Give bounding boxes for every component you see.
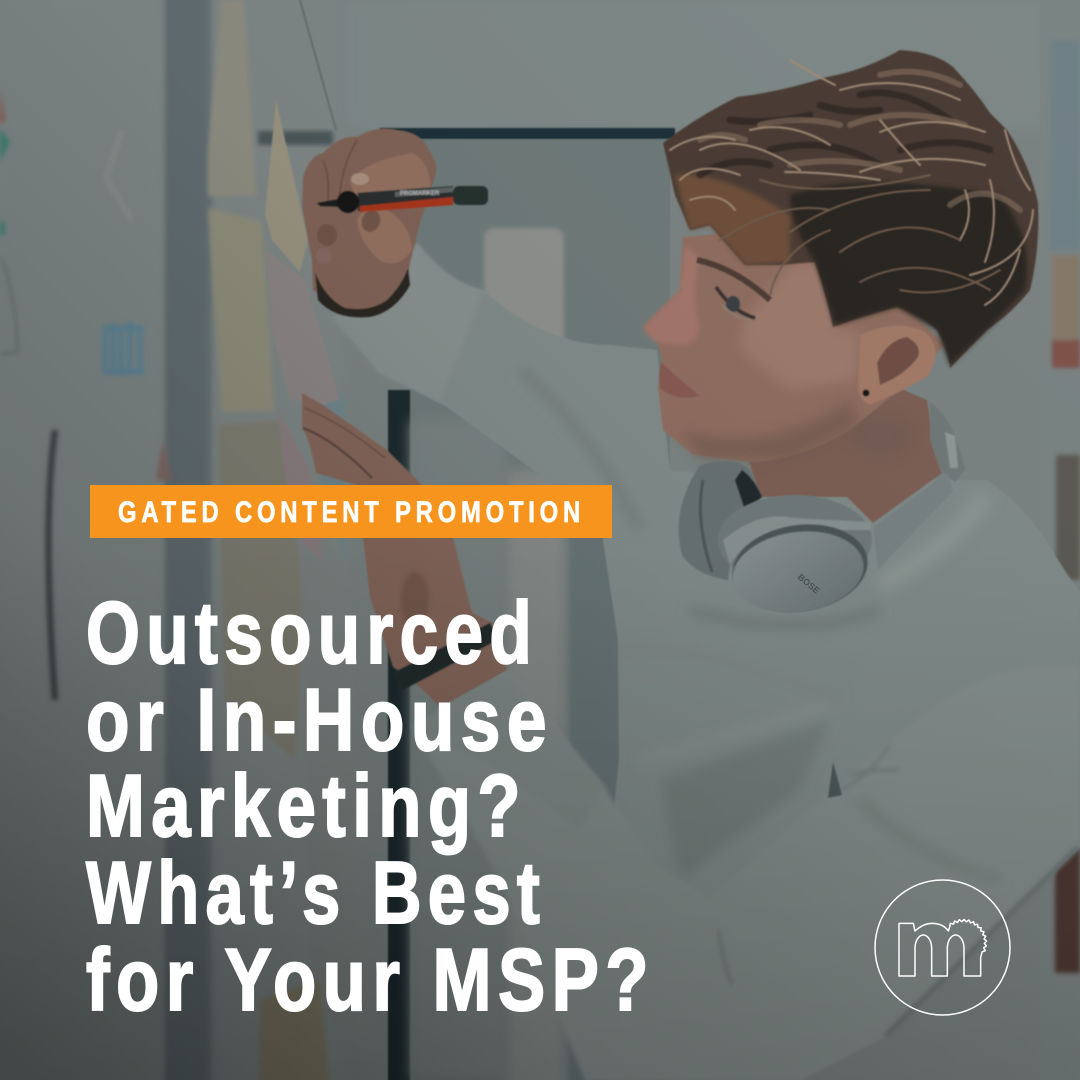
marker pen — [317, 186, 488, 213]
ear — [858, 326, 936, 405]
sweater cuff upper arm — [333, 243, 483, 400]
mouth — [659, 362, 700, 398]
lower thumb — [357, 208, 412, 264]
person: forearm sleeve — [413, 667, 1080, 1080]
front ear cup face — [727, 516, 873, 620]
thumb — [350, 153, 430, 195]
headphones: BOSE — [796, 572, 822, 596]
band — [873, 473, 953, 570]
eye and brow — [697, 260, 770, 320]
nose — [643, 245, 700, 345]
sticky notes on the wall — [208, 0, 375, 1080]
badge: gated content promotion — [90, 485, 612, 538]
badge: gated content promotion: GATED CONTENT PROMOTION — [118, 496, 585, 529]
cuff shadow — [315, 268, 410, 317]
title: Outsourced — [86, 583, 538, 682]
left wall marks — [0, 88, 172, 700]
front ear cup pad — [718, 495, 872, 585]
person: sweater torso and upper arm — [333, 243, 1080, 1080]
title: What’s Best — [86, 843, 546, 942]
person: neck — [747, 380, 942, 523]
door frame — [258, 128, 675, 1080]
title: Marketing? — [86, 756, 527, 855]
person: face — [643, 230, 945, 462]
marker pen: PROMARKER — [400, 191, 440, 197]
lit cheek and forehead — [740, 262, 860, 390]
lower hand and fingers on wall — [302, 393, 507, 707]
hair texture dark tufts — [700, 93, 990, 175]
hair texture mid tufts — [700, 72, 1020, 210]
person: hair — [663, 50, 1038, 368]
title: or In-House — [86, 670, 553, 769]
title — [86, 583, 655, 1029]
wristwatch — [393, 623, 497, 690]
upper hand holding marker — [302, 129, 436, 317]
title: for Your MSP? — [86, 930, 655, 1029]
stubble shade — [680, 400, 860, 462]
logo — [875, 880, 1010, 1015]
headphones — [679, 402, 965, 621]
sweater folds — [520, 370, 985, 880]
slider — [930, 402, 965, 482]
right wall posters — [1050, 40, 1080, 973]
window column — [165, 0, 213, 1080]
back ear cup — [679, 461, 762, 580]
hair highlights — [670, 60, 1033, 305]
